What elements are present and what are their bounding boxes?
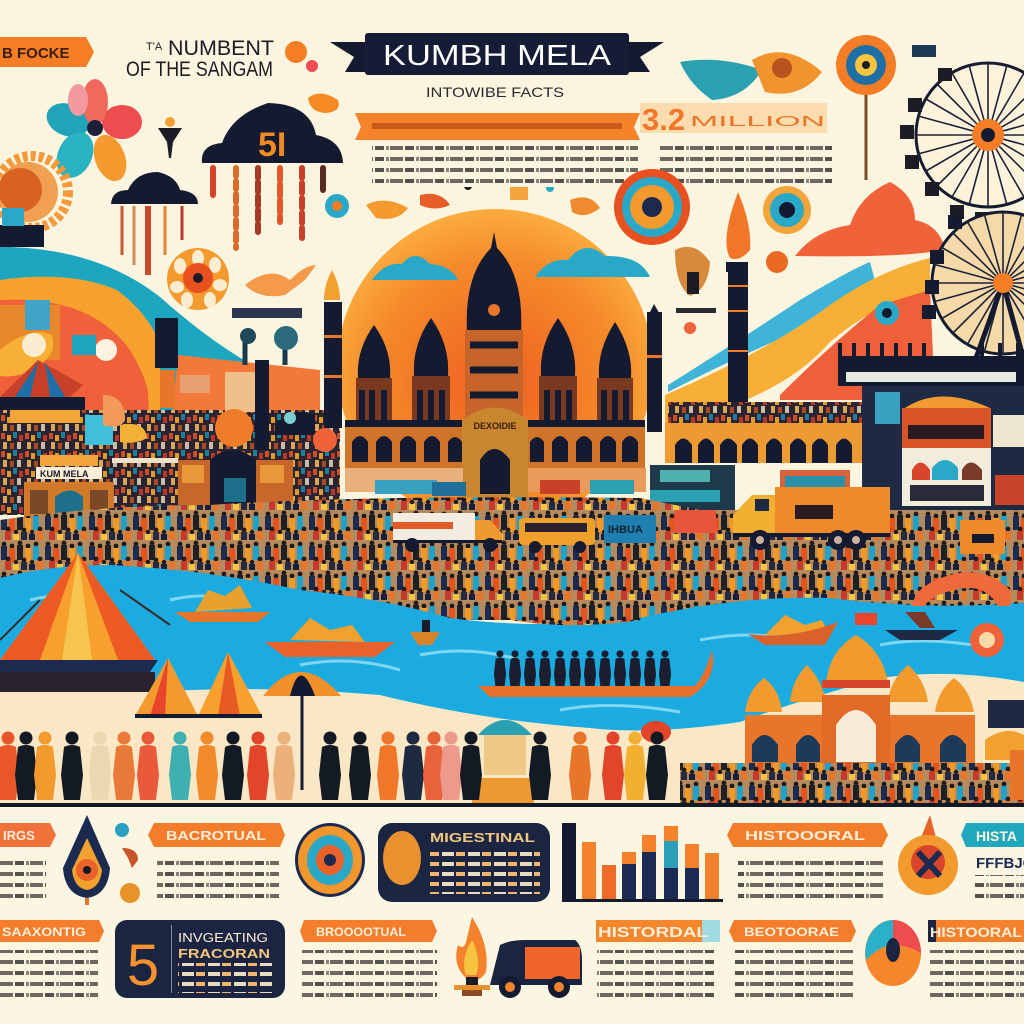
icon: blue medal xyxy=(763,186,811,234)
icon: river medallion xyxy=(970,623,1004,657)
section: tag 3: HISTOOORAL xyxy=(745,828,865,843)
icon: target circle xyxy=(614,169,690,245)
section: right heading xyxy=(928,920,1024,942)
sign: red xyxy=(674,510,716,533)
section: right heading: HISTOORAL xyxy=(930,924,1022,940)
section: teal tag xyxy=(961,823,1024,847)
central portal xyxy=(462,408,528,500)
icon: blue badge on hill xyxy=(875,301,899,325)
section: tag 4: SAAXONTIG xyxy=(2,925,86,939)
cloud icons on sun xyxy=(372,248,650,280)
text block 3 xyxy=(738,855,884,899)
ferris wheel lower xyxy=(922,211,1024,355)
panel: historical dark xyxy=(378,823,550,902)
text block 6 xyxy=(597,950,715,1000)
icon: flower on pin xyxy=(836,35,896,180)
central left pavilion xyxy=(112,450,293,505)
text block: stat xyxy=(660,145,832,189)
truck: small far right xyxy=(960,520,1005,554)
left pavilion xyxy=(24,455,114,522)
foreground people xyxy=(0,732,668,800)
text block 1 xyxy=(0,855,46,899)
stat: 3.2 million: MILLION xyxy=(690,113,825,130)
subtitle: INTOWIBE FACTS xyxy=(426,84,564,100)
pie chart xyxy=(865,920,921,986)
icon: red badge xyxy=(641,721,671,743)
tag: top left label xyxy=(0,37,94,67)
umbrella xyxy=(263,672,341,790)
ferris wheel upper xyxy=(900,63,1024,226)
river highlights xyxy=(30,595,1000,712)
crowd at riverbank xyxy=(470,560,650,625)
lower section background xyxy=(0,807,1024,1024)
icon: flame on stand xyxy=(454,917,490,996)
icon: sun flower xyxy=(167,248,229,310)
stat: 3.2 million xyxy=(640,102,827,137)
central portal: DEXOIDIE xyxy=(473,421,517,431)
kiosk xyxy=(472,720,534,803)
left rainbow hills xyxy=(0,247,320,440)
icon: burst xyxy=(898,815,958,895)
section: tag 3 xyxy=(727,823,888,847)
truck: blue xyxy=(604,515,656,543)
section: historical heading: HISTORDAL xyxy=(598,924,708,941)
ground line xyxy=(0,803,1024,807)
onion dome palace xyxy=(745,635,975,765)
section: teal tag: HISTA xyxy=(976,828,1017,844)
icon: dark cloud with number: 5I xyxy=(258,126,286,164)
hanging ornaments xyxy=(213,168,323,248)
beach xyxy=(0,660,1024,805)
icon: flower xyxy=(42,79,142,186)
section: tag 6: BEOTOORAE xyxy=(744,925,839,939)
river xyxy=(0,565,1024,730)
truck: blue: IHBUA xyxy=(608,524,643,536)
central dome xyxy=(465,232,523,420)
minarets xyxy=(324,270,662,432)
crowd band xyxy=(0,497,1024,620)
small icons near tower xyxy=(675,247,788,334)
small tents xyxy=(135,652,262,718)
title ribbon: KUMBH MELA xyxy=(383,40,612,72)
small scattered items row xyxy=(366,182,600,219)
panel: five facts: 5 xyxy=(127,933,159,998)
facade xyxy=(345,420,645,470)
subtitle banner xyxy=(355,113,640,140)
orange bridge xyxy=(912,572,1010,606)
stat: 3.2 million: 3.2 xyxy=(642,102,685,137)
heading: sangam xyxy=(126,37,274,81)
palace crowd xyxy=(680,763,1024,803)
boat: left centre xyxy=(265,618,395,657)
icon: dark cloud with number xyxy=(202,103,343,164)
section: tag 5 xyxy=(300,920,437,942)
heading: sangam: NUMBENT xyxy=(168,37,274,60)
section: tag 2: BACROTUAL xyxy=(166,828,266,843)
icon: torch tower xyxy=(726,192,750,405)
icon: small spinning top xyxy=(158,117,182,158)
icon: small dark cloud with strands xyxy=(111,172,198,275)
panel: five facts: INVGEATING xyxy=(178,930,268,945)
panel: five facts xyxy=(115,920,285,998)
facade signage xyxy=(345,468,646,496)
icon: blue ring xyxy=(325,194,349,218)
icon: elephant truck xyxy=(490,940,582,998)
section: tag 6 xyxy=(729,920,856,942)
long boat with passengers xyxy=(478,650,713,697)
text block right xyxy=(975,875,1024,899)
boat: far right xyxy=(855,612,958,640)
icons: small decor xyxy=(115,823,140,903)
section: tag 2 xyxy=(148,823,285,847)
right building xyxy=(862,386,1024,510)
heading: sangam: T'A xyxy=(146,41,163,53)
left carnival xyxy=(0,300,340,515)
boat: small centre xyxy=(410,620,440,645)
section: historical heading xyxy=(596,920,720,942)
text block: intro xyxy=(372,145,638,187)
side domes xyxy=(358,318,631,378)
text block 2 xyxy=(157,855,279,899)
section: tag 5: BROOOOTUAL xyxy=(316,925,406,939)
icon: mandala xyxy=(295,823,365,897)
bar chart xyxy=(562,823,723,902)
icon: orange cloud xyxy=(795,182,945,256)
right arcade xyxy=(665,402,863,463)
bus: yellow xyxy=(519,518,595,553)
title ribbon xyxy=(330,33,664,75)
text block 8 xyxy=(930,950,1024,1000)
panel: five facts: FRACORAN xyxy=(178,946,270,961)
section: tag 1 xyxy=(0,823,56,847)
icon: orange rays top left xyxy=(0,156,68,247)
icon: teardrop xyxy=(63,815,110,905)
tag: top left label: B FOCKE xyxy=(2,45,70,62)
mid band buildings xyxy=(650,465,735,510)
icon: orange blob xyxy=(308,93,339,113)
icon: flower small xyxy=(285,41,318,72)
left pavilion: KUM MELA xyxy=(40,469,89,479)
temple xyxy=(345,232,646,500)
big striped tent xyxy=(0,553,170,692)
boat: upper left xyxy=(175,585,270,622)
icons: top right objects xyxy=(680,45,936,100)
section: tag 1: IRGS xyxy=(3,828,35,843)
bunting and right pavilion xyxy=(985,700,1024,800)
dark skyline with fence xyxy=(838,273,1024,386)
text block 4 xyxy=(0,950,98,1000)
text block 5 xyxy=(302,950,437,1000)
boat: right xyxy=(748,615,838,645)
right rainbow hills xyxy=(665,258,935,425)
section: tag 4 xyxy=(0,920,104,942)
text block 7 xyxy=(735,950,853,1000)
dome bodies xyxy=(356,376,633,424)
panel: historical dark: MIGESTINAL xyxy=(430,830,535,845)
truck: white xyxy=(393,513,502,552)
truck: orange xyxy=(733,470,890,550)
great sun xyxy=(337,209,653,525)
heading: sangam: OF THE SANGAM xyxy=(126,58,273,81)
icon: bird and clouds xyxy=(232,265,316,318)
